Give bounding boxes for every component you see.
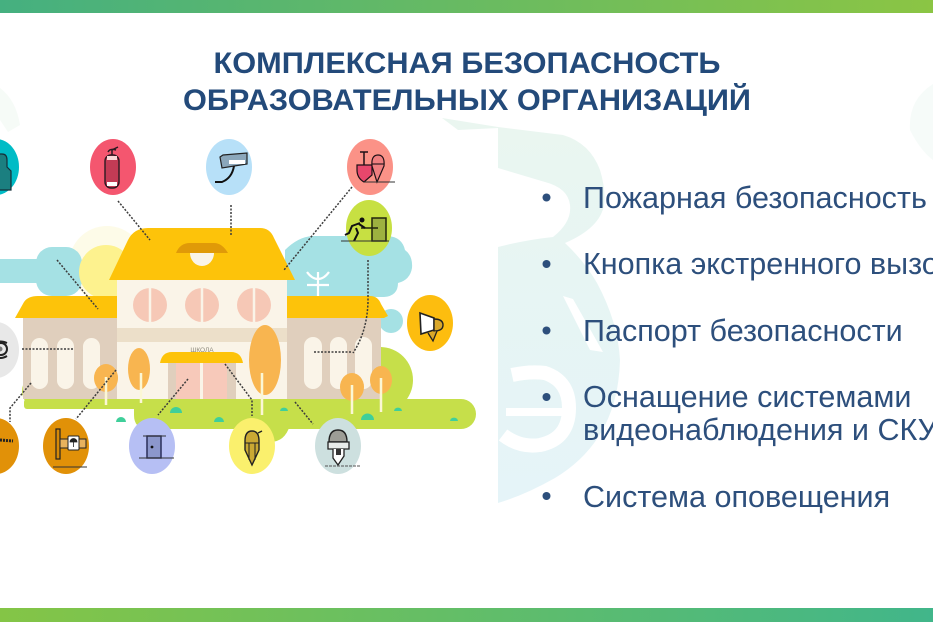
background clouds and sun xyxy=(0,226,412,333)
title: КОМПЛЕКСНАЯ БЕЗОПАСНОСТЬ xyxy=(214,47,720,80)
central block xyxy=(117,280,287,399)
bottom green bar xyxy=(0,608,933,622)
icon: grey speaker xyxy=(0,322,19,378)
item 4: Оснащение системами xyxy=(583,380,911,414)
illustration: school building: ШКОЛА xyxy=(190,347,214,354)
bushes xyxy=(116,407,458,422)
icon: guard in helmet xyxy=(315,418,361,474)
item 4 xyxy=(542,380,933,447)
antenna xyxy=(307,272,329,296)
bullet list xyxy=(542,181,933,514)
icon: fire shovel and bucket xyxy=(347,139,395,195)
trees xyxy=(94,325,392,401)
arched top windows xyxy=(133,288,271,322)
green ground xyxy=(22,347,476,442)
item 1: Пожарная безопасность xyxy=(583,181,927,215)
icon: light bulb xyxy=(229,418,275,474)
icon: fire extinguisher xyxy=(90,139,136,195)
icon: card reader turnstile xyxy=(43,418,89,474)
item 3: Паспорт безопасности xyxy=(583,314,903,348)
icon: megaphone xyxy=(407,295,453,351)
wings xyxy=(23,316,117,399)
icon: door xyxy=(129,418,175,474)
icon: teal person xyxy=(0,139,19,195)
title xyxy=(183,47,751,117)
dotted connector lines xyxy=(10,187,368,424)
wing roofs xyxy=(15,296,117,318)
entrance xyxy=(168,363,236,399)
icon: barrier gate xyxy=(0,418,19,474)
item 5: Система оповещения xyxy=(583,480,890,514)
top green bar xyxy=(0,0,933,13)
watermark logo xyxy=(0,84,933,503)
icon: security camera xyxy=(206,139,252,195)
main roof xyxy=(109,228,295,280)
illustration: school building xyxy=(0,226,476,442)
icon: emergency exit xyxy=(341,200,392,256)
title: ОБРАЗОВАТЕЛЬНЫХ ОРГАНИЗАЦИЙ xyxy=(183,83,751,117)
